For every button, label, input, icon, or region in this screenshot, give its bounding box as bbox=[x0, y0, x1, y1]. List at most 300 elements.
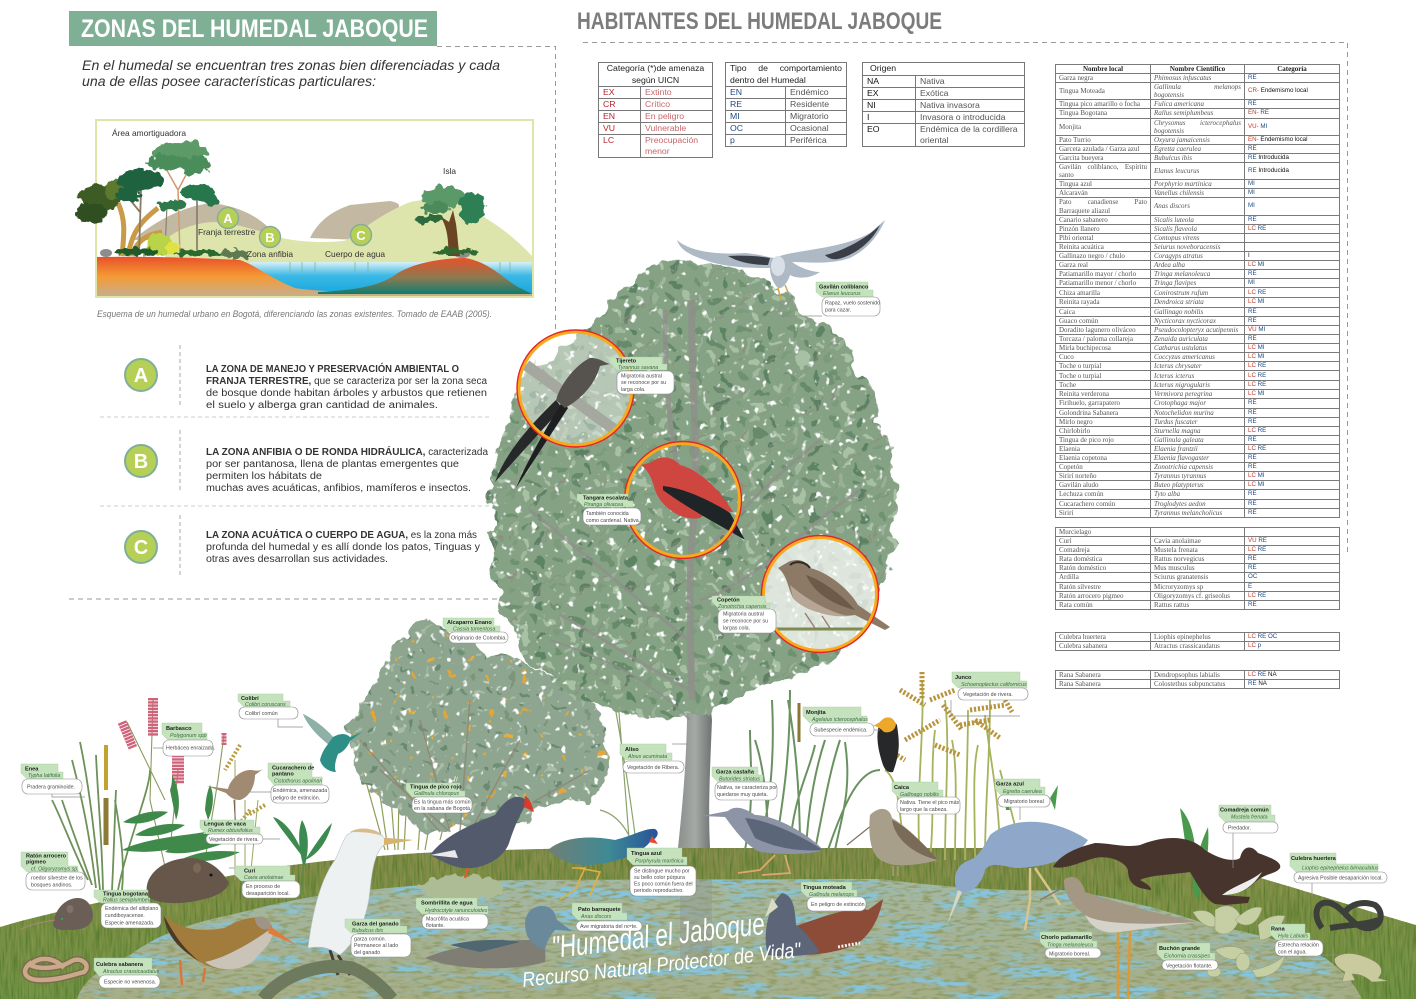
label: garza castana: Garza castaña bbox=[716, 770, 755, 776]
plants: arrowhead leaves bbox=[273, 817, 332, 895]
table: aves: RE bbox=[1248, 335, 1257, 342]
label: buchon: Buchón grande bbox=[1159, 946, 1200, 952]
table: aves: RE bbox=[1248, 500, 1257, 506]
diagram: zones of the wetland: Isla bbox=[443, 166, 456, 176]
label: pato barraquete: Anas discors bbox=[580, 914, 612, 920]
table: aves: RE bbox=[1248, 100, 1257, 107]
table: mamiferos: Mustela frenata bbox=[1154, 546, 1198, 554]
legend: tipo de comportamiento: EN bbox=[730, 87, 742, 97]
table: aves: MI bbox=[1248, 279, 1255, 286]
label: garza azul: Garza azul bbox=[996, 782, 1024, 788]
table: ranas bbox=[1055, 670, 1340, 689]
animal: gavilan coliblanco bbox=[677, 220, 885, 300]
label: tingua de pico rojo: Gallinula chloropus bbox=[414, 791, 459, 797]
table: mamiferos: E bbox=[1248, 583, 1252, 590]
table: aves: Pseudocolopteryx acutipennis bbox=[1154, 326, 1238, 334]
table: aves: RE bbox=[1248, 74, 1257, 81]
label: tingua azul: periodo reproductivo. bbox=[634, 888, 684, 894]
legend: categoria de amenaza: Crítico bbox=[645, 99, 670, 109]
table: aves: RE bbox=[1248, 145, 1257, 152]
animal: caica bbox=[847, 809, 938, 876]
table: aves: MI bbox=[1248, 180, 1255, 187]
table: mamiferos: Rattus norvegicus bbox=[1154, 555, 1204, 563]
legend: origen: EO bbox=[867, 124, 880, 134]
table: aves: Barraquete aliazul bbox=[1059, 206, 1110, 214]
table: culebras bbox=[1055, 632, 1340, 651]
label: monjita bbox=[803, 707, 874, 736]
diagram: zones of the wetland bbox=[77, 120, 533, 297]
table: culebras: Atractus crassicaudatus bbox=[1154, 642, 1220, 650]
label: rana: Rana bbox=[1271, 926, 1286, 932]
label: garza azul: Migratorio boreal bbox=[1004, 799, 1044, 805]
table: aves: Vanellus chilensis bbox=[1154, 189, 1204, 197]
tree: aliso bbox=[489, 260, 896, 848]
table: aves: Oxyura jamaicensis bbox=[1154, 136, 1210, 144]
animal: comadreja bbox=[1053, 838, 1280, 905]
label: tijereta: Tijereto bbox=[616, 358, 637, 364]
table: aves: Cuco bbox=[1059, 353, 1074, 361]
table: aves: Torcaza / paloma collareja bbox=[1059, 335, 1133, 343]
table: aves: Chiza amarilla bbox=[1059, 289, 1100, 297]
water: pool bbox=[77, 879, 1362, 999]
legend: categoria de amenaza: CR bbox=[603, 99, 616, 109]
table: aves: RE bbox=[1248, 308, 1257, 315]
intro text bbox=[82, 57, 500, 89]
label: copeton: Migratoria austral bbox=[723, 612, 764, 618]
legend: categoria de amenaza: EN bbox=[603, 111, 615, 121]
table: aves: Garza real bbox=[1059, 261, 1088, 269]
table: aves: Elaenia bbox=[1059, 445, 1080, 453]
legend: categoria de amenaza: VU bbox=[603, 123, 615, 133]
label: aliso: Vegetación de Ribera. bbox=[627, 765, 679, 771]
table: aves: Reinita rayada bbox=[1059, 298, 1100, 306]
legend: categoria de amenaza: LC bbox=[603, 135, 614, 145]
label: culebra sabanera bbox=[94, 958, 160, 988]
table: aves: bogotensis bbox=[1154, 91, 1184, 99]
legend: categoria de amenaza: EX bbox=[603, 87, 615, 97]
diagram: zones of the wetland: Cuerpo de agua bbox=[325, 249, 385, 259]
label: tangara: Piranga olivacea bbox=[584, 502, 623, 508]
label: copeton: Copetón bbox=[717, 598, 740, 604]
label: tingua azul: Es poco común fuera del bbox=[634, 882, 693, 888]
table: aves: RE bbox=[1248, 409, 1257, 416]
plant: sombrillita bbox=[420, 875, 504, 901]
table: mamiferos: Rata doméstica bbox=[1059, 555, 1102, 563]
label: garza azul bbox=[995, 779, 1050, 807]
label: enea: Typha latifolia bbox=[28, 773, 60, 779]
label: caica: Nativa. Tiene el pico más bbox=[900, 800, 960, 806]
table: aves: santo bbox=[1059, 171, 1074, 179]
legend: tipo de comportamiento: Endémico bbox=[790, 87, 829, 97]
label: garza del ganado: Garza del ganado bbox=[352, 922, 399, 928]
reeds behind the bush bbox=[360, 690, 637, 850]
table: aves: Porphyrio martinica bbox=[1154, 180, 1212, 188]
label: tijereta bbox=[610, 357, 674, 394]
label: barbasco: Herbácea enraizada. bbox=[166, 746, 215, 752]
table: aves: Copetón bbox=[1059, 463, 1083, 471]
legend: tipo de comportamiento: Ocasional bbox=[790, 123, 829, 133]
label: garza azul: Egretta caerulea bbox=[1003, 789, 1042, 795]
table: aves: Icterus chrysater bbox=[1154, 362, 1202, 370]
table: mamiferos: RE bbox=[1248, 555, 1257, 562]
table: aves: Anas discors bbox=[1154, 202, 1190, 210]
label: culebra sabanera: Culebra sabanera bbox=[96, 962, 144, 968]
label: sombrillita bbox=[416, 898, 488, 929]
table: mamiferos: Cavia anolaimae bbox=[1154, 537, 1201, 545]
label: aliso: Aliso bbox=[625, 747, 639, 753]
table: culebras: LC RE OC bbox=[1248, 633, 1277, 640]
table: aves: Tyto alba bbox=[1154, 490, 1180, 498]
animal: garza del ganado bbox=[263, 829, 412, 999]
table: aves: RE Introducida bbox=[1248, 167, 1289, 174]
table: aves: Toche o turpial bbox=[1059, 372, 1101, 380]
table: aves: Tingua Bogotana bbox=[1059, 109, 1107, 117]
table: aves: Tringa melanoleuca bbox=[1154, 270, 1210, 278]
table: aves: Egretta caerulea bbox=[1154, 145, 1201, 153]
zone C bbox=[125, 528, 480, 565]
zone A: LA ZONA DE MANEJO Y PRESERVACIÓN AMBIENTAL O bbox=[206, 362, 459, 375]
label: tingua bogotana: Tingua bogotana bbox=[103, 892, 149, 898]
table: aves: LC MI bbox=[1248, 472, 1265, 479]
slogan: "Humedal el Jaboque bbox=[550, 906, 766, 965]
zone C: profunda del humedal y es allí donde los patos, Tinguas y bbox=[206, 542, 480, 553]
label: alcaparro enano bbox=[443, 618, 508, 643]
label: aliso bbox=[620, 744, 684, 773]
table: aves: RE bbox=[1248, 418, 1257, 425]
legend: tipo de comportamiento: Periférica bbox=[790, 135, 827, 145]
animal: garza azul bbox=[947, 822, 1088, 930]
label: tingua bogotana: Especie amenazada. bbox=[105, 920, 154, 926]
label: curi: Curí bbox=[244, 868, 256, 874]
label: tingua de pico rojo: Tingua de pico rojo bbox=[410, 784, 462, 790]
label: sombrillita: Sombrillita de agua bbox=[421, 900, 473, 906]
table: aves: bogotensis bbox=[1154, 127, 1184, 135]
animal: chorlo patiamarillo bbox=[1040, 877, 1198, 999]
label: junco: Junco bbox=[955, 675, 972, 681]
table: aves: LC RE bbox=[1248, 381, 1266, 388]
label: colibri bbox=[238, 694, 298, 719]
table: aves: Tingua azul bbox=[1059, 180, 1092, 188]
label: tingua azul: Porphyrula martinica bbox=[635, 858, 684, 864]
table: aves: VU- MI bbox=[1248, 123, 1267, 130]
table: aves: I bbox=[1248, 252, 1250, 259]
label: tingua moteada: Gallinula melanops bbox=[809, 892, 854, 898]
table: mamiferos: Ratón arrocero pigmeo bbox=[1059, 592, 1124, 600]
table: aves: VU MI bbox=[1248, 326, 1265, 333]
table: aves: Alcaraván bbox=[1059, 189, 1088, 197]
table: aves: Contopus virens bbox=[1154, 234, 1199, 242]
label: colibri: Colibrí común bbox=[245, 711, 278, 717]
label: barbasco bbox=[162, 723, 215, 756]
plants: junco bbox=[880, 672, 1020, 860]
table: aves: Tingua pico amarillo o focha bbox=[1059, 100, 1140, 108]
table: aves: Gallinazo negro / chulo bbox=[1059, 252, 1125, 260]
legend: origen: NI bbox=[867, 100, 876, 110]
label: buchon bbox=[1157, 943, 1218, 970]
animal: culebra huertera bbox=[1316, 903, 1381, 928]
label: tangara: Tangara escalata bbox=[583, 496, 629, 502]
label: buchon: Vegetación flotante. bbox=[1166, 964, 1213, 970]
table: aves: Buteo platypterus bbox=[1154, 481, 1204, 489]
table: aves: Toche bbox=[1059, 381, 1076, 389]
animal: colibri bbox=[303, 714, 362, 772]
label: tingua bogotana: Endémica del altiplano bbox=[105, 906, 158, 912]
table: aves: Tringa flavipes bbox=[1154, 279, 1196, 287]
label: tingua moteada bbox=[801, 882, 866, 911]
table: mamiferos: Murcielago bbox=[1059, 528, 1091, 536]
table: aves: Tingua de pico rojo bbox=[1059, 436, 1114, 444]
table: aves: Bubulcus ibis bbox=[1154, 154, 1192, 162]
table: aves: Elaenia copetona bbox=[1059, 454, 1107, 462]
table: ranas: Rana Sabanera bbox=[1059, 671, 1101, 679]
label: tingua bogotana bbox=[94, 890, 161, 928]
label: rana: Hyla Labialis bbox=[1278, 934, 1308, 940]
table: aves: EN- RE bbox=[1248, 109, 1269, 116]
table: aves: Phimosus infuscatus bbox=[1154, 74, 1211, 82]
plants: reeds centre right bbox=[745, 690, 880, 850]
table: aves: Elaenia frantzii bbox=[1154, 445, 1198, 453]
table: aves: RE bbox=[1248, 454, 1257, 461]
table: aves: RE bbox=[1248, 216, 1257, 223]
table: mamiferos bbox=[1055, 527, 1340, 610]
label: monjita: Agelaius icterocephalus bbox=[811, 717, 868, 723]
label: garza del ganado: Permanece al lado bbox=[354, 943, 398, 949]
table: aves: Monjita bbox=[1059, 123, 1081, 131]
label: garza castana: Butorides striatus bbox=[719, 776, 760, 782]
label: junco: Vegetación de rivera. bbox=[963, 692, 1013, 698]
table: aves: Chrysomus icterocephalus bbox=[1154, 119, 1241, 127]
slogan: Recurso Natural Protector de Vida" bbox=[521, 939, 803, 992]
table: aves: Elaenia flavogaster bbox=[1154, 454, 1209, 462]
table: aves: Conirostrum rufum bbox=[1154, 289, 1208, 297]
table: mamiferos: RE bbox=[1248, 601, 1257, 608]
label: enea: Pradera graminoide. bbox=[27, 784, 75, 790]
label: culebra huertera: Agresiva Posible desaparición local. bbox=[1298, 876, 1383, 882]
diagram: zones of the wetland: A bbox=[223, 211, 233, 226]
table: aves: Sturnella magna bbox=[1154, 427, 1200, 435]
label: culebra sabanera: Especie no venenosa. bbox=[104, 980, 156, 986]
label: tingua moteada: En peligro de extinción bbox=[811, 902, 865, 908]
table: aves: Rallus semiplumbeus bbox=[1154, 109, 1213, 117]
table: aves: LC RE bbox=[1248, 427, 1266, 434]
table: mamiferos: VU RE bbox=[1248, 537, 1267, 544]
plants: enea and barbasco bbox=[52, 698, 265, 890]
table: culebras: LC p bbox=[1248, 642, 1261, 649]
table: mamiferos: Curí bbox=[1059, 537, 1071, 545]
legend: origen: Endémica de la cordillera bbox=[920, 124, 1018, 134]
legend: tipo de comportamiento: p bbox=[730, 135, 735, 145]
label: tingua de pico rojo bbox=[406, 783, 472, 813]
table: aves: Tingua Moteada bbox=[1059, 87, 1105, 95]
intro text: una de ellas posee características particulares: bbox=[82, 73, 376, 89]
heading: zonas: ZONAS DEL HUMEDAL JABOQUE bbox=[81, 15, 428, 43]
label: cucarachero: Cucarachero de bbox=[272, 766, 314, 772]
legend: categoria de amenaza: Extinto bbox=[645, 87, 672, 97]
label: enea: Enea bbox=[25, 766, 39, 772]
label: tingua de pico rojo: en la sabana de Bogotá. bbox=[414, 806, 471, 812]
legend: origen: I bbox=[867, 112, 869, 122]
slogan bbox=[521, 906, 803, 992]
label: comadreja: Predador. bbox=[1228, 826, 1251, 832]
legend: origen bbox=[862, 62, 1025, 147]
zone B: LA ZONA ANFIBIA O DE RONDA HIDRÁULICA, caracterizada bbox=[206, 445, 488, 458]
table: ranas: Dendropsophus labialis bbox=[1154, 671, 1220, 679]
zone A: A bbox=[134, 365, 148, 387]
label: alcaparro enano: Alcaparro Enano bbox=[447, 620, 492, 626]
table: ranas: Rana Sabanera bbox=[1059, 680, 1101, 688]
label: alcaparro enano: Originario de Colombia. bbox=[451, 636, 507, 642]
table: aves: Fulica americana bbox=[1154, 100, 1204, 108]
table: aves: Notochelidon murina bbox=[1154, 409, 1214, 417]
legend: origen: NA bbox=[867, 76, 879, 86]
table: aves: RE bbox=[1248, 490, 1257, 497]
legend: categoria de amenaza: Categoría (*)de amenaza bbox=[607, 63, 704, 73]
animal: curi bbox=[147, 858, 229, 903]
table: mamiferos: LC RE bbox=[1248, 592, 1266, 599]
label: gavilan coliblanco: Gavilán coliblanco bbox=[819, 284, 869, 290]
table: aves: MI bbox=[1248, 202, 1255, 209]
label: gavilan coliblanco: para cazar. bbox=[825, 308, 851, 314]
table: mamiferos: Oligoryzomys cf. griseolus bbox=[1154, 592, 1230, 600]
diagram: zones of the wetland: Área amortiguadora bbox=[112, 128, 186, 138]
table: aves: Golondrina Sabanera bbox=[1059, 409, 1118, 417]
label: aliso: Alnus acuminata bbox=[627, 754, 667, 760]
label: chorlo: Chorlo patiamarillo bbox=[1041, 935, 1093, 941]
legend: tipo de comportamiento: MI bbox=[730, 111, 740, 121]
table: mamiferos: Ratón doméstico bbox=[1059, 564, 1106, 572]
label: comadreja bbox=[1219, 805, 1278, 833]
table: mamiferos: LC RE bbox=[1248, 546, 1266, 553]
table: aves: Pinzón llanero bbox=[1059, 225, 1100, 233]
label: garza castana: Nativa, se caracteriza por bbox=[717, 785, 777, 791]
legend: origen: Origen bbox=[870, 63, 896, 73]
legend: categoria de amenaza: menor bbox=[645, 146, 670, 156]
legend: tipo de comportamiento: dentro del Humedal bbox=[730, 74, 806, 84]
label: tangara: como cardenal. Nativa. bbox=[586, 518, 640, 524]
legend: categoria de amenaza: Preocupación bbox=[645, 135, 698, 145]
table: aves: Pato canadiense Pato bbox=[1059, 198, 1147, 206]
table: mamiferos: Ardilla bbox=[1059, 573, 1079, 581]
table: mamiferos: Microryzomys sp bbox=[1154, 583, 1203, 591]
label: chorlo: Migratorio boreal. bbox=[1049, 952, 1090, 958]
table: aves: RE bbox=[1248, 270, 1257, 277]
label: colibri: Colibri coruscans bbox=[245, 702, 286, 708]
table: mamiferos: Rata común bbox=[1059, 601, 1093, 609]
zone C: LA ZONA ACUÁTICA O CUERPO DE AGUA, es la zona más bbox=[206, 528, 477, 541]
table: aves: EN- Endemismo local bbox=[1248, 136, 1308, 143]
table: aves: Garza negra bbox=[1059, 74, 1093, 82]
label: caica: Gallinago nobilis bbox=[900, 792, 939, 798]
table: aves: Canario sabanero bbox=[1059, 216, 1108, 224]
label: rana: Estrecha relación bbox=[1278, 942, 1319, 948]
label: cucarachero: Cistothorus apolinari bbox=[274, 778, 323, 784]
label: lengua de vaca: Rumex obtusifolius bbox=[208, 828, 253, 834]
table: aves: LC MI bbox=[1248, 481, 1265, 488]
table: aves: Gallinago nobilis bbox=[1154, 308, 1203, 316]
label: chorlo bbox=[1040, 932, 1101, 958]
zone B: B bbox=[134, 451, 148, 473]
diagram: zones of the wetland: B bbox=[265, 230, 275, 245]
label: curi: desaparición local. bbox=[246, 891, 290, 897]
table: aves: LC MI bbox=[1248, 298, 1265, 305]
label: raton arrocero: bosques andinos. bbox=[31, 882, 73, 888]
plants: tall leaves near weasel bbox=[1004, 785, 1208, 900]
legend: tipo de comportamiento: RE bbox=[730, 99, 742, 109]
table: aves: Categoría bbox=[1277, 65, 1307, 73]
table: aves: Dendroica striata bbox=[1154, 298, 1204, 306]
zone A bbox=[125, 359, 487, 411]
table: aves: RE bbox=[1248, 399, 1257, 406]
label: tijereta: Tyrannus savana bbox=[618, 365, 658, 371]
animal: tingua moteada bbox=[765, 893, 883, 956]
animal: tingua de pico rojo bbox=[430, 796, 534, 878]
label: tijereta: larga cola. bbox=[621, 387, 645, 393]
label: copeton: se reconoce por su bbox=[723, 618, 768, 624]
shrub: alcaparro enano bbox=[348, 620, 607, 832]
zone A: FRANJA TERRESTRE, que se caracteriza por ser la zona seca bbox=[206, 376, 487, 387]
table: aves: LC RE bbox=[1248, 362, 1266, 369]
table: ranas: Colostethus subpunctatus bbox=[1154, 680, 1225, 688]
label: garza castana: quedarse muy quieta. bbox=[717, 792, 768, 798]
table: aves: Ardea alba bbox=[1154, 261, 1185, 269]
label: tingua azul: Se distingue mucho por bbox=[634, 868, 690, 874]
table: aves: RE Introducida bbox=[1248, 154, 1289, 161]
label: sombrillita: Hydrocotyle ranunculoides bbox=[425, 908, 488, 914]
animal: culebra sabanera bbox=[25, 959, 87, 980]
legend: origen: Invasora o introducida bbox=[920, 112, 1005, 122]
label: tingua azul: Tingua azul bbox=[631, 851, 662, 857]
legend: categoria de amenaza bbox=[598, 62, 713, 158]
legend: tipo de comportamiento: Residente bbox=[790, 99, 829, 109]
table: aves: Sirirí norteño bbox=[1059, 472, 1097, 480]
table: aves: Sicalis flaveola bbox=[1154, 225, 1197, 233]
table: aves: Cucarachero común bbox=[1059, 500, 1115, 508]
label: culebra huertera: Liophis epinephelus bimaculatus bbox=[1302, 866, 1379, 872]
table: aves: CR- Endemismo local bbox=[1248, 87, 1308, 94]
table: aves: Pato Turrio bbox=[1059, 136, 1091, 144]
animal: tingua azul bbox=[548, 829, 658, 899]
zone B: por ser pantanosa, llena de plantas emergentes que bbox=[206, 459, 459, 470]
label: copeton bbox=[712, 596, 776, 633]
label: monjita: Monjita bbox=[806, 710, 826, 716]
table: aves: Gavilán coliblanco, Espíritu bbox=[1059, 163, 1147, 171]
animal: monjita bbox=[873, 717, 899, 772]
label: sombrillita: Macrófita acuática bbox=[426, 916, 469, 922]
legend: origen: Nativa invasora bbox=[920, 100, 980, 110]
label: alcaparro enano: Cassia tomentosa bbox=[453, 626, 495, 632]
table: aves: LC MI bbox=[1248, 344, 1265, 351]
table: aves: LC RE bbox=[1248, 372, 1266, 379]
label: garza castana bbox=[712, 767, 777, 800]
table: aves: Reinita verderona bbox=[1059, 390, 1109, 398]
label: gavilan coliblanco: Rapaz, vuelo sostenido bbox=[825, 300, 880, 306]
table: aves: Reinita acuática bbox=[1059, 243, 1104, 251]
label: copeton: largas cola. bbox=[723, 626, 750, 632]
table: aves: Firihuelo, garrapatero bbox=[1059, 399, 1120, 407]
circle: tijereta bbox=[495, 330, 634, 488]
label: lengua de vaca: Vegetación de rivera. bbox=[209, 837, 259, 843]
label: curi: En proceso de bbox=[246, 884, 280, 890]
table: aves: Doradito lagunero oliváceo bbox=[1059, 326, 1136, 334]
label: junco: Schoenoplectus californicus bbox=[961, 682, 1027, 688]
table: aves: RE bbox=[1248, 436, 1257, 443]
table: mamiferos: Mus musculus bbox=[1154, 564, 1195, 572]
label: tingua azul bbox=[627, 848, 696, 896]
label: culebra sabanera: Atractus crassicaudatus bbox=[102, 969, 160, 975]
label: copeton: Zonotrichia capensis bbox=[717, 604, 767, 610]
table: aves: LC RE bbox=[1248, 445, 1266, 452]
circle: copeton bbox=[762, 536, 890, 652]
